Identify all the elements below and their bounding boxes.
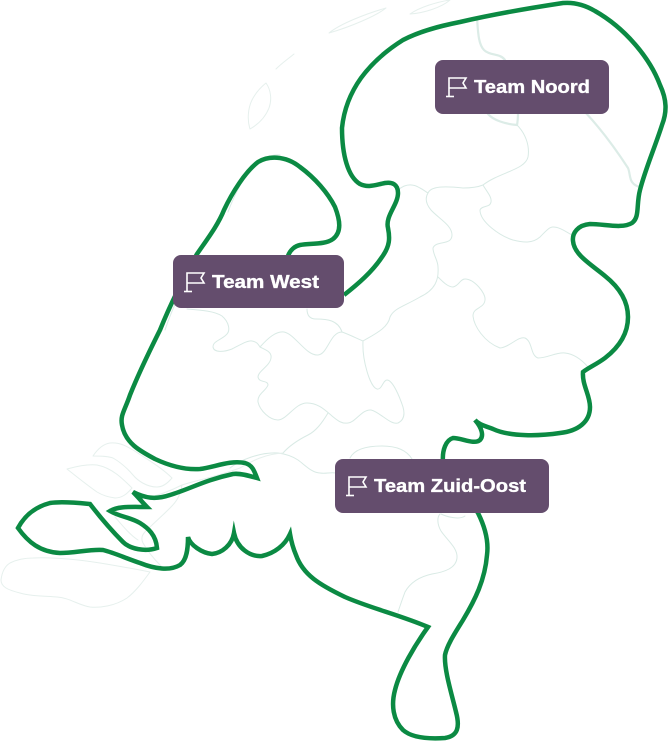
Wadden islands [248, 0, 450, 129]
coast along west lobe [228, 155, 280, 212]
icon: flag [346, 477, 366, 496]
label: Team Noord [435, 60, 609, 114]
label: Team Zuid-Oost [335, 459, 549, 513]
label: Team West [173, 255, 344, 308]
thick northern borders [477, 18, 640, 187]
southern province line [398, 514, 457, 612]
icon: flag [446, 78, 466, 96]
northern and eastern province lines [483, 125, 528, 185]
central province lines [187, 309, 363, 355]
icon: flag [184, 273, 204, 292]
label: Team Noord: Team Noord [474, 77, 590, 97]
province borders [1, 0, 640, 612]
label: Team West: Team West [212, 272, 319, 292]
Zeeland islands [1, 443, 283, 607]
label: Team Zuid-Oost: Team Zuid-Oost [374, 476, 526, 496]
